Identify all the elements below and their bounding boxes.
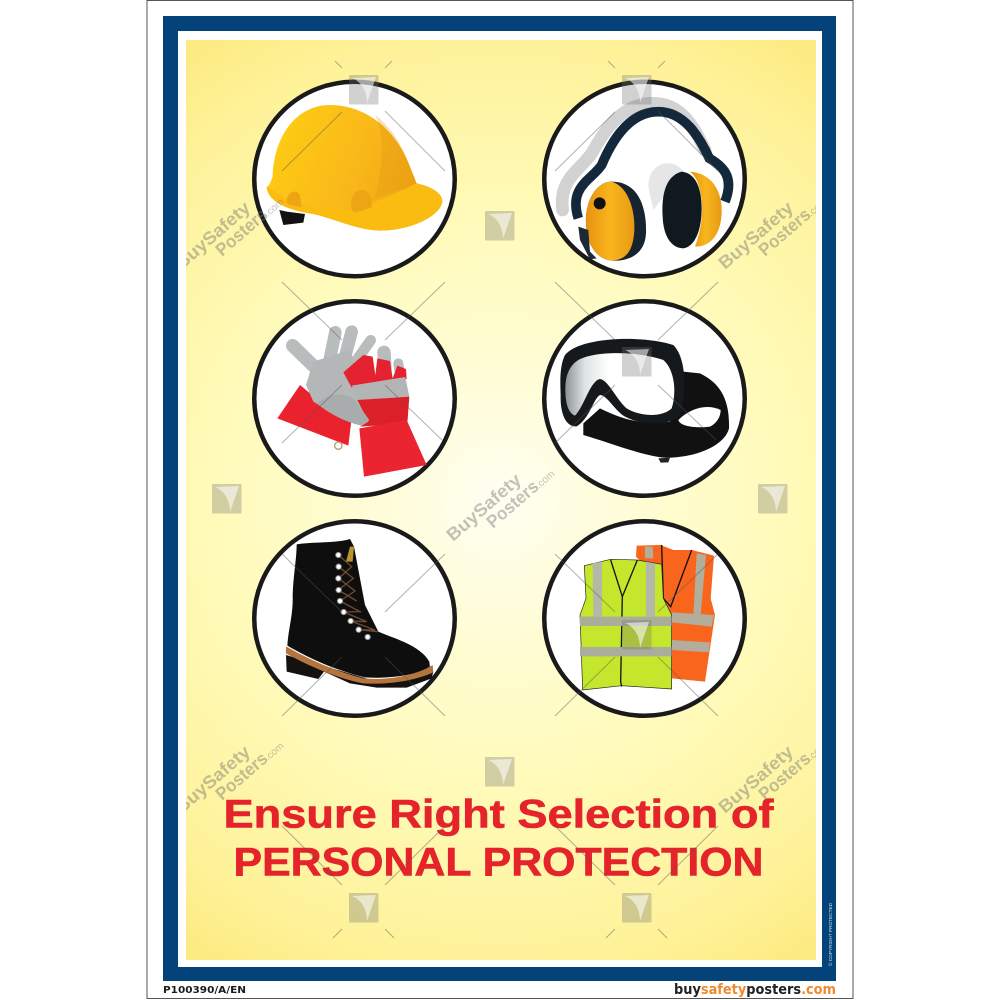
title <box>224 792 774 884</box>
watermark: brand text: Posters <box>755 204 814 260</box>
icon: safety boot <box>286 539 433 688</box>
title: Ensure Right Selection of <box>224 792 774 836</box>
watermark: brand text: Posters <box>212 204 271 260</box>
title: PERSONAL PROTECTION <box>234 840 764 884</box>
watermark: brand text: Posters <box>483 476 542 532</box>
icon: hi-vis vests <box>580 545 715 690</box>
watermark: brand text: .com <box>806 197 829 219</box>
watermark: brand text: BuySafety <box>443 470 525 545</box>
circle: goggles <box>544 301 745 496</box>
watermark: brand text: .com <box>263 197 286 219</box>
watermark: tile marks <box>212 61 788 938</box>
watermark: brand text: .com <box>263 741 286 763</box>
watermark: brand text: BuySafety <box>715 198 797 273</box>
watermark: brand text: Posters <box>212 748 271 804</box>
yellow background panel <box>186 40 816 960</box>
white inner border <box>178 31 822 967</box>
circle: hard hat <box>254 82 455 276</box>
circle: ear muffs <box>544 82 745 276</box>
watermark: brand text: BuySafety <box>715 742 797 817</box>
navy frame <box>163 16 836 981</box>
icon: hard hat <box>267 105 442 231</box>
icon: safety goggles <box>560 339 729 463</box>
icon: ear defenders <box>562 103 729 261</box>
product code: P100390/A/EN <box>163 985 246 996</box>
icon: work gloves <box>277 332 427 477</box>
watermark: brand text: BuySafety <box>172 742 254 817</box>
watermark: brand text: Posters <box>755 748 814 804</box>
website: buysafetyposters.com <box>674 982 836 998</box>
copyright note: © COPYRIGHT PROTECTED <box>827 902 833 966</box>
watermark: brand text: BuySafety <box>172 198 254 273</box>
watermark: brand text: .com <box>534 469 557 491</box>
watermark: brand text: .com <box>806 741 829 763</box>
page sheet <box>147 0 853 998</box>
watermark: brand text <box>172 197 829 817</box>
circle: hi-vis vests <box>544 521 745 716</box>
circle: gloves <box>254 301 455 496</box>
circle: boot <box>254 521 455 716</box>
